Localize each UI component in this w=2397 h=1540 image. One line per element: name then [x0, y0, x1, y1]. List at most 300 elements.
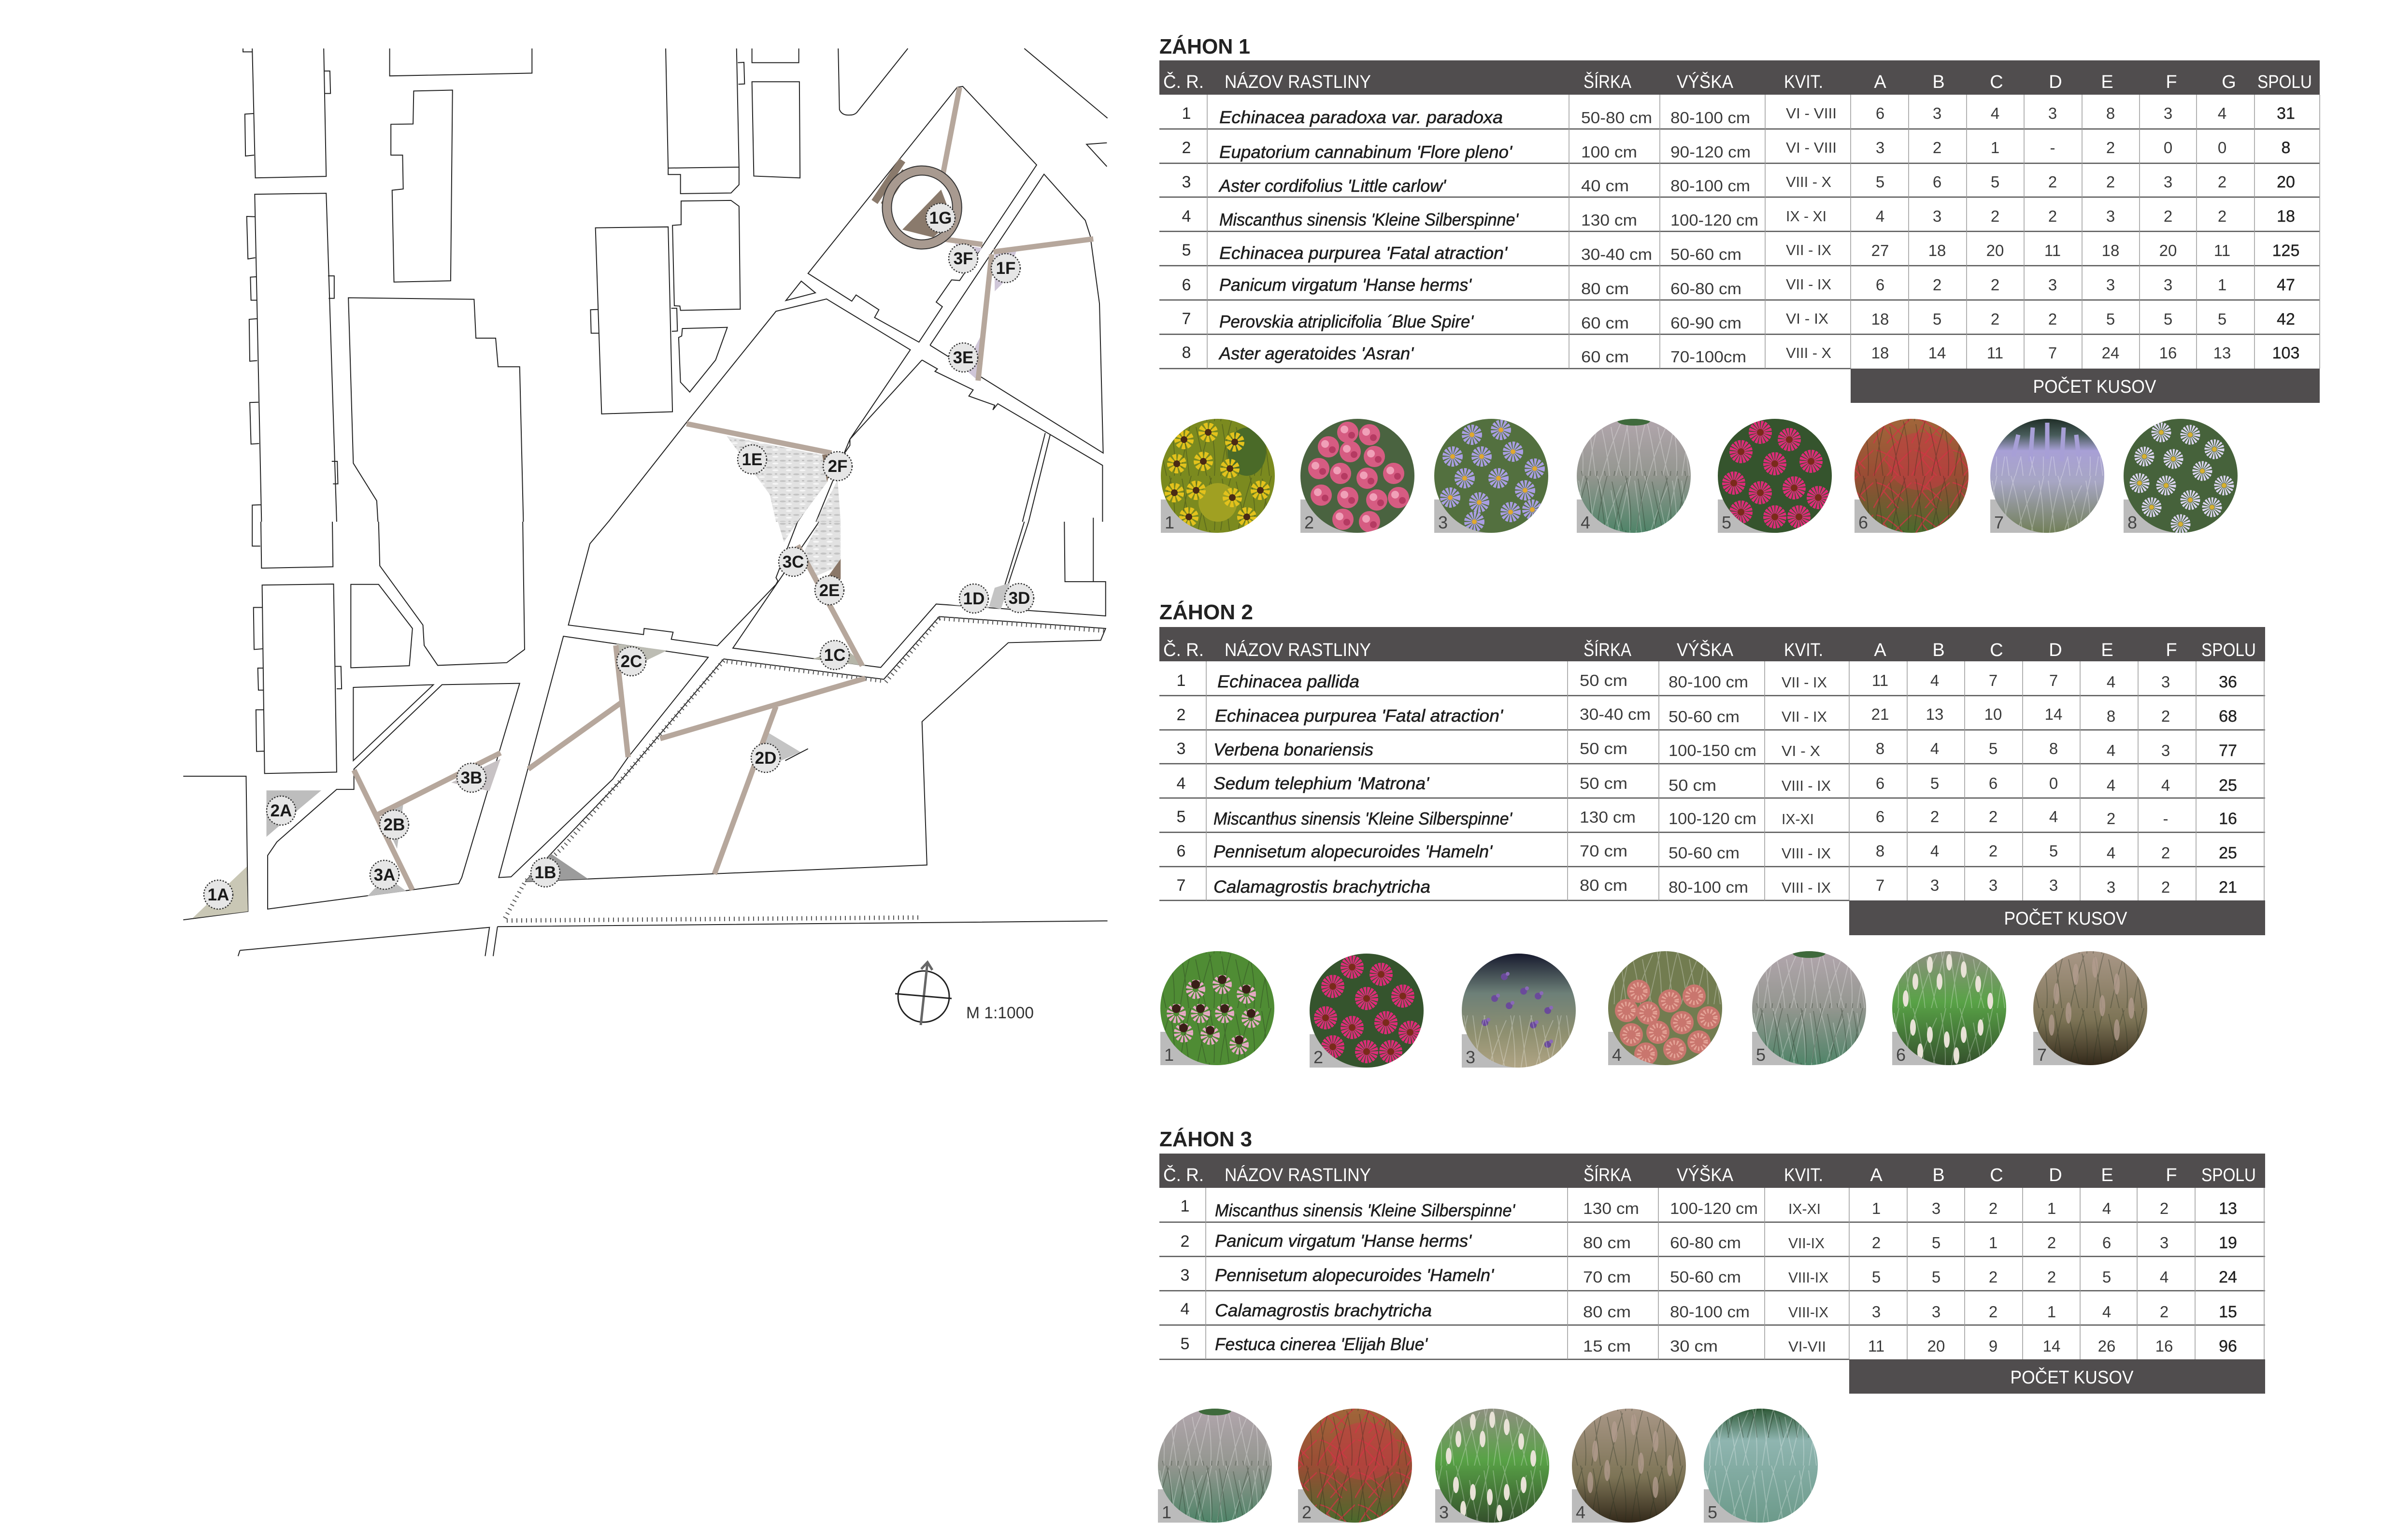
row 7: 42: [2277, 310, 2295, 328]
row 4: 3: [1872, 1303, 1881, 1321]
row 3: 50 cm: [1580, 740, 1627, 757]
row 3: 2: [1989, 1268, 1998, 1286]
photo 5: Echinacea purpurea: 5: [1722, 513, 1731, 532]
photo 3: Aster cordifolius: 3: [1438, 513, 1448, 532]
row 1: 4: [2102, 1199, 2111, 1217]
row 3: 3: [2161, 741, 2170, 759]
photo 2: Panicum: [1298, 1409, 1412, 1523]
photo 1: Echinacea pallida: [1160, 951, 1274, 1065]
row 5: 18: [1928, 242, 1946, 259]
row 4: 2: [1989, 1303, 1998, 1321]
row 1: 130 cm: [1583, 1199, 1639, 1217]
bed markers: 1A: [208, 885, 229, 904]
photo 3: Verbena: [1462, 954, 1576, 1068]
row 5: IX-XI: [1782, 811, 1814, 827]
row 6: Panicum virgatum 'Hanse herms': [1219, 275, 1472, 295]
photo 2: Echinacea purpurea: 2: [1313, 1047, 1323, 1067]
row 7: 2: [2161, 878, 2170, 896]
row 4: 3: [1932, 1303, 1940, 1321]
row 4: 80-100 cm: [1670, 1303, 1750, 1321]
photo 4: Miscanthus: [1577, 416, 1691, 533]
row 6: 3: [2164, 276, 2172, 294]
bed markers: 3F: [954, 249, 973, 268]
row 6: 80 cm: [1581, 280, 1629, 298]
row 7: [1182, 310, 2295, 332]
table 1 footer: POČET KUSOV: [2033, 376, 2156, 397]
table 3 footer: POČET KUSOV: [2011, 1367, 2134, 1388]
row 5: 50-60 cm: [1670, 245, 1741, 263]
photo 5: Festuca: 5: [1708, 1502, 1717, 1522]
row 6: 8: [1876, 842, 1884, 860]
row 6: 60-80 cm: [1670, 280, 1741, 298]
row 7: 3: [2049, 876, 2058, 894]
row 4: 2: [2160, 1303, 2169, 1321]
row 5: 11: [2214, 242, 2230, 259]
row 3: 50-60 cm: [1670, 1268, 1741, 1286]
table 2 footer: [1849, 900, 2265, 935]
row 7: 21: [2219, 878, 2237, 897]
row 7: 2: [1991, 310, 1999, 328]
bed markers: 3C: [783, 553, 804, 571]
row 3: 3: [2164, 173, 2172, 191]
row 6: 4: [2107, 844, 2115, 862]
row 8: 60 cm: [1581, 348, 1629, 366]
scale label: M 1:1000: [966, 1004, 1034, 1022]
photo 4: Sedum: [1608, 951, 1722, 1066]
row 2: Panicum virgatum 'Hanse herms': [1215, 1231, 1472, 1251]
row 3: 8: [2049, 740, 2058, 757]
row 4: 4: [1182, 207, 1191, 226]
row 7: [1177, 876, 2237, 897]
row 7: Perovskia atriplicifolia ´Blue Spire': [1219, 312, 1474, 331]
bed markers: 1D: [963, 589, 984, 608]
row 8: Aster ageratoides 'Asran': [1218, 343, 1414, 363]
table 1 header: NÁZOV RASTLINY: [1225, 71, 1371, 92]
table 1 header: D: [2049, 72, 2062, 92]
row 2: 2: [1933, 139, 1941, 157]
row 4: 100-120 cm: [1670, 211, 1758, 229]
row 2: 14: [2045, 705, 2062, 723]
row 4: 4: [1876, 207, 1884, 225]
row 2: [1177, 705, 2237, 726]
row 8: 103: [2272, 344, 2299, 362]
row 3: [1177, 740, 2237, 760]
table 2 header: VÝŠKA: [1677, 639, 1734, 660]
table 2 header: SPOLU: [2201, 640, 2256, 660]
row 1: 6: [1876, 104, 1884, 122]
row 6: 47: [2277, 276, 2295, 294]
photo 1: Echinacea pallida: 1: [1164, 1045, 1174, 1065]
row 1: Miscanthus sinensis 'Kleine Silberspinne': [1215, 1200, 1515, 1220]
row 5: [1177, 808, 2237, 828]
row 3: VI - X: [1782, 742, 1820, 759]
row 4: 4: [1177, 774, 1185, 793]
row 1: Echinacea pallida: [1217, 671, 1359, 691]
row 6: 2: [1989, 842, 1998, 860]
row 3: 24: [2219, 1268, 2237, 1286]
table: bed 3: [1159, 1154, 2265, 1394]
row 6: 25: [2219, 844, 2237, 862]
row 5: 6: [1876, 808, 1884, 826]
row 2: 30-40 cm: [1580, 705, 1651, 723]
row 3: 80-100 cm: [1670, 177, 1750, 195]
row 5: Echinacea purpurea 'Fatal atraction': [1219, 243, 1508, 263]
row 5: Miscanthus sinensis 'Kleine Silberspinne': [1213, 809, 1512, 828]
row 1: 3: [2048, 104, 2057, 122]
row 6: VII - IX: [1786, 276, 1831, 293]
row 7: 5: [2218, 310, 2226, 328]
table 1 header: [1159, 60, 2320, 95]
row 3: 5: [1991, 173, 1999, 191]
table: bed 1: [1159, 60, 2320, 403]
row 5: 4: [2049, 808, 2058, 826]
row 6: 6: [1182, 276, 1191, 294]
row 3: 6: [1933, 173, 1941, 191]
row 1: 3: [2161, 673, 2170, 691]
row 6: 6: [1177, 842, 1185, 860]
row 4: Miscanthus sinensis 'Kleine Silberspinne': [1219, 210, 1519, 229]
row 1: 80-100 cm: [1670, 109, 1750, 127]
row 5: 27: [1871, 242, 1889, 259]
table 2 header: F: [2166, 640, 2177, 660]
row 2: 10: [1984, 705, 2002, 723]
bed markers: 3A: [374, 866, 395, 884]
table 2 header: Č. R.: [1163, 639, 1204, 660]
photo 6: Panicum: [1855, 419, 1969, 533]
row 1: 1: [2047, 1199, 2056, 1217]
row 1: Echinacea paradoxa var. paradoxa: [1219, 107, 1503, 127]
row 2: [1181, 1231, 2237, 1252]
row 4: 6: [1876, 774, 1884, 792]
photo 2: Echinacea purpurea: [1310, 954, 1424, 1068]
photo 7: Calamagrostis: [2033, 951, 2147, 1065]
row 5: -: [2163, 810, 2168, 827]
row 7: 80-100 cm: [1669, 878, 1748, 896]
table: bed 2: [1159, 627, 2265, 935]
row 5: VI-VII: [1788, 1338, 1826, 1355]
photo 5: Echinacea purpurea: [1718, 419, 1832, 533]
row 6: 5: [2049, 842, 2058, 860]
row 6: 70 cm: [1580, 842, 1627, 860]
row 7: 5: [2164, 310, 2172, 328]
row 5: 5: [1181, 1335, 1189, 1353]
row 5: 20: [2159, 242, 2177, 259]
row 4: 3: [1933, 207, 1941, 225]
row 3: 8: [1876, 740, 1884, 757]
row 7: 18: [1871, 310, 1889, 328]
photo 4: Calamagrostis: 4: [1576, 1502, 1585, 1522]
row 2: 2: [1181, 1232, 1189, 1251]
photo 2: Eupatorium: 2: [1304, 513, 1314, 532]
table 3 header: F: [2166, 1165, 2177, 1185]
row 2: VII-IX: [1788, 1235, 1825, 1252]
row 2: 1: [1989, 1234, 1998, 1252]
row 5: 20: [1986, 242, 2004, 259]
row 3: Pennisetum alopecuroides 'Hameln': [1215, 1265, 1494, 1285]
row 2: 8: [2107, 707, 2115, 725]
row 8: 18: [1871, 344, 1889, 362]
row 2: 0: [2218, 139, 2226, 157]
table 1 header: Č. R.: [1163, 71, 1204, 92]
photo 5: Festuca: [1704, 1409, 1818, 1523]
table 3 header: SPOLU: [2201, 1165, 2256, 1185]
row 3: 4: [1930, 740, 1939, 757]
row 6: VIII - IX: [1782, 845, 1831, 862]
site plan map: [183, 48, 1108, 956]
photo 8: Aster ageratoides: 8: [2127, 513, 2137, 532]
photo 3: Verbena: 3: [1466, 1047, 1475, 1067]
row 5: 20: [1927, 1337, 1945, 1355]
photo 7: Perovskia: [1990, 419, 2104, 533]
table 3 header: KVIT.: [1784, 1165, 1823, 1185]
row 5: 11: [2044, 242, 2061, 259]
row 7: 2: [2048, 310, 2057, 328]
photo 6: Panicum: 6: [1858, 513, 1868, 532]
row 3: 4: [2160, 1268, 2169, 1286]
row 8: 16: [2159, 344, 2177, 362]
row 1: 4: [1991, 104, 1999, 122]
row 6: 50-60 cm: [1669, 844, 1740, 862]
row 7: 60-90 cm: [1670, 314, 1741, 332]
row 1: [1177, 671, 2237, 691]
table 1 header: C: [1990, 72, 2003, 92]
row 2: 50-60 cm: [1669, 708, 1740, 726]
row 4: [1181, 1300, 2237, 1321]
row 1: 3: [2164, 104, 2172, 122]
row 5: 100-120 cm: [1669, 810, 1756, 827]
photo 2: Eupatorium: [1300, 419, 1414, 533]
bed markers: 1F: [996, 259, 1015, 278]
row 1: 50 cm: [1580, 671, 1627, 689]
row 7: 5: [2106, 310, 2115, 328]
photo 3: Pennisetum: 3: [1439, 1502, 1449, 1522]
row 8: 14: [1928, 344, 1946, 362]
row 3: 40 cm: [1581, 177, 1629, 195]
row 4: 4: [1181, 1300, 1189, 1318]
table 3 header: A: [1870, 1165, 1883, 1185]
row 4: VIII-IX: [1788, 1304, 1828, 1321]
row 5: 2: [2107, 810, 2115, 827]
row 2: 80 cm: [1583, 1234, 1631, 1252]
row 1: 31: [2277, 104, 2295, 123]
row 4: Sedum telephium 'Matrona': [1213, 773, 1429, 793]
row 4: 5: [1930, 774, 1939, 792]
row 1: 1: [1181, 1197, 1189, 1215]
table 1 header: G: [2222, 72, 2236, 92]
photo 5: Miscanthus: [1752, 948, 1866, 1065]
row 1: 36: [2219, 673, 2237, 691]
row 1: 4: [1930, 671, 1939, 689]
row 4: Calamagrostis brachytricha: [1215, 1300, 1432, 1320]
bed markers: 2F: [828, 457, 847, 476]
row 4: VIII - IX: [1782, 777, 1831, 794]
row 3: 5: [1872, 1268, 1881, 1286]
row 2: [1182, 139, 2290, 162]
row 5: [1182, 241, 2299, 263]
row 6: 2: [1991, 276, 1999, 294]
table 3 header: C: [1990, 1165, 2003, 1185]
row 5: Festuca cinerea 'Elijah Blue': [1215, 1334, 1428, 1354]
row 3: 100-150 cm: [1669, 741, 1756, 759]
row 2: 3: [2160, 1234, 2169, 1252]
row 8: [1182, 343, 2299, 366]
row 2: 21: [1871, 705, 1889, 723]
photos: bed 3: [1158, 1406, 1818, 1523]
bed markers: [204, 203, 1034, 909]
row 5: 15 cm: [1583, 1337, 1631, 1355]
row 1: IX-XI: [1788, 1200, 1821, 1217]
row 4: 1: [2047, 1303, 2056, 1321]
row 3: 5: [1932, 1268, 1940, 1286]
bed 1 title: ZÁHON 1: [1159, 34, 1250, 58]
row 1: 13: [2219, 1199, 2237, 1218]
row 2: 6: [2102, 1234, 2111, 1252]
row 3: 3: [1182, 173, 1191, 191]
bed markers: 2D: [755, 749, 776, 768]
photo 7: Calamagrostis: 7: [2037, 1045, 2047, 1065]
row 4: 2: [2048, 207, 2057, 225]
bed markers: 3D: [1009, 589, 1030, 608]
row 5: 30-40 cm: [1581, 245, 1652, 263]
table 3 header: E: [2101, 1165, 2113, 1185]
row 2: 1: [1991, 139, 1999, 157]
photo 1: Echinacea paradoxa: 1: [1165, 513, 1174, 532]
row 3: Aster cordifolius 'Little carlow': [1218, 176, 1446, 196]
photo 6: Pennisetum: [1892, 951, 2006, 1065]
row 7: 7: [1876, 876, 1884, 894]
row 3: 2: [2218, 173, 2226, 191]
table 3 header: VÝŠKA: [1677, 1164, 1734, 1185]
table 1 header: ŠÍRKA: [1584, 71, 1632, 92]
table 2 header: [1159, 627, 2265, 661]
row 1: 2: [2160, 1199, 2169, 1217]
row 6: [1177, 841, 2237, 862]
row 2: 3: [1876, 139, 1884, 157]
table 1 header: B: [1932, 72, 1945, 92]
row 7: 5: [1933, 310, 1941, 328]
photo 2: Panicum: 2: [1302, 1502, 1312, 1522]
photo 1: Miscanthus: 1: [1162, 1502, 1171, 1522]
row 4: 50 cm: [1580, 774, 1627, 792]
row 1: 3: [1932, 1199, 1940, 1217]
row 5: 16: [2155, 1337, 2173, 1355]
row 4: 2: [2164, 207, 2172, 225]
table 2 footer: POČET KUSOV: [2004, 908, 2127, 929]
map lower linework: [183, 522, 1108, 956]
row 7: VI - IX: [1786, 310, 1828, 327]
row 3: 77: [2219, 741, 2237, 760]
map upper linework: [243, 48, 1108, 522]
row 1: VII - IX: [1782, 674, 1827, 691]
row 3: 3: [1177, 740, 1185, 758]
bed 2 title: ZÁHON 2: [1159, 600, 1253, 624]
bed markers: 1B: [535, 863, 556, 882]
table 1 header: VÝŠKA: [1677, 71, 1734, 92]
table 2 header: A: [1874, 640, 1886, 660]
row 1: 100-120 cm: [1670, 1199, 1758, 1217]
row 2: VI - VIII: [1786, 139, 1837, 156]
table 1 header: E: [2101, 72, 2113, 92]
table 3 header: D: [2049, 1165, 2062, 1185]
table 2 header: D: [2049, 640, 2062, 660]
photo 7: Perovskia: 7: [1994, 513, 2004, 532]
row 4: 18: [2277, 207, 2295, 226]
bed markers: 1C: [824, 646, 845, 665]
row 8: 70-100cm: [1670, 348, 1746, 366]
table 2 header: NÁZOV RASTLINY: [1225, 640, 1371, 660]
row 7: 7: [1182, 310, 1191, 328]
row 5: 18: [2102, 242, 2119, 259]
row 5: 5: [1177, 808, 1185, 826]
row 2: 2: [2161, 707, 2170, 725]
row 2: 60-80 cm: [1670, 1234, 1741, 1252]
row 8: 24: [2102, 344, 2119, 362]
row 3: 5: [1876, 173, 1884, 191]
bed 3 title: ZÁHON 3: [1159, 1127, 1252, 1151]
row 3: Verbena bonariensis: [1213, 740, 1373, 759]
row 1: [1181, 1197, 2237, 1220]
photo 8: Aster ageratoides: [2124, 419, 2238, 533]
row 3: 70 cm: [1583, 1268, 1631, 1286]
row 1: 4: [2218, 104, 2226, 122]
row 1: 1: [1182, 104, 1191, 123]
row 2: 2: [1872, 1234, 1881, 1252]
row 2: 68: [2219, 707, 2237, 726]
row 1: 8: [2106, 104, 2115, 122]
row 5: 16: [2219, 810, 2237, 828]
table 1 header: F: [2166, 72, 2177, 92]
row 4: 4: [2161, 776, 2170, 794]
row 7: 7: [1177, 876, 1185, 895]
row 3: VIII - X: [1786, 173, 1831, 190]
row 4: 130 cm: [1581, 211, 1637, 229]
bed markers: 2C: [621, 652, 642, 671]
table 2 header: B: [1932, 640, 1945, 660]
row 4: 2: [1991, 207, 1999, 225]
row 2: 2: [2106, 139, 2115, 157]
row 3: 20: [2277, 173, 2295, 191]
row 5: 130 cm: [1580, 808, 1636, 826]
bed markers: 1E: [742, 450, 762, 469]
photo 3: Pennisetum: [1435, 1409, 1549, 1523]
row 2: 13: [1926, 705, 1943, 723]
table 1 header: A: [1874, 72, 1886, 92]
row 2: VII - IX: [1782, 708, 1827, 725]
row 1: 1: [1177, 671, 1185, 690]
bed markers: 2B: [384, 815, 405, 834]
row 1: 2: [1989, 1199, 1998, 1217]
row 2: 8: [2282, 139, 2290, 157]
row 6: 3: [2048, 276, 2057, 294]
photo 5: Miscanthus: 5: [1756, 1045, 1766, 1065]
row 1: 1: [1872, 1199, 1881, 1217]
row 5: 30 cm: [1670, 1337, 1718, 1355]
photo 4: Miscanthus: 4: [1581, 513, 1590, 532]
row 3: [1181, 1265, 2237, 1286]
row 2: 2: [1182, 139, 1191, 157]
row 3: VIII-IX: [1788, 1269, 1828, 1286]
bed markers: 2A: [271, 801, 292, 820]
row 3: 5: [1989, 740, 1998, 757]
row 8: 7: [2048, 344, 2057, 362]
row 5: 5: [1182, 241, 1191, 259]
row 6: 2: [1933, 276, 1941, 294]
row 4: 25: [2219, 776, 2237, 795]
table 3 header: ŠÍRKA: [1584, 1164, 1632, 1185]
table 3 header: NÁZOV RASTLINY: [1225, 1165, 1371, 1185]
row 7: 3: [1989, 876, 1998, 894]
row 2: 19: [2219, 1234, 2237, 1252]
